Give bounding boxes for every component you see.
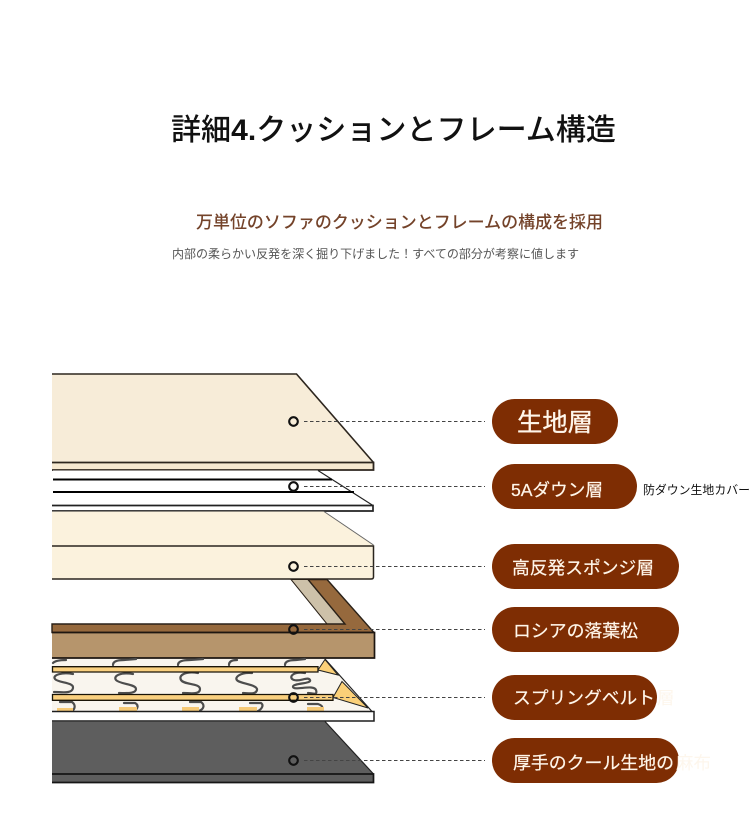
callout: high-resilience sponge layer <box>289 544 679 589</box>
layer: high-resilience sponge <box>52 512 374 579</box>
note: down-proof fabric cover: 防ダウン生地カバー <box>643 482 750 497</box>
layer: spring belts <box>52 659 374 721</box>
callout: spring belt <box>289 675 674 720</box>
callout: 5A down layer <box>289 464 637 509</box>
description text: 内部の柔らかい反発を深く掘り下げました！すべての部分が考察に値します <box>172 246 579 261</box>
title: 詳細4.クッションとフレーム構造 <box>171 114 616 147</box>
subtitle: 万単位のソファのクッションとフレームの構成を採用 <box>196 213 603 232</box>
callout: fabric layer <box>289 399 618 444</box>
callout: spring belt: スプリングベルト <box>513 688 655 708</box>
callout: thick cool fabric <box>289 738 711 783</box>
callout: high-resilience sponge layer: 高反発スポンジ層 <box>512 558 654 578</box>
callout: fabric layer: 生地層 <box>517 409 593 437</box>
callout: Russian larch: ロシアの落葉松 <box>513 621 638 641</box>
callout: thick cool fabric: 厚手のクール生地の <box>513 753 674 773</box>
layer: fabric layer <box>52 374 374 470</box>
callout: thick cool fabric: 麻布 <box>676 753 711 773</box>
callout: spring belt: 層 <box>657 688 674 708</box>
layer: 5A down layer <box>52 470 373 511</box>
callout: 5A down layer: 5Aダウン層 <box>511 480 603 500</box>
layer: thick cool fabric <box>52 722 374 783</box>
callout: Russian larch <box>289 607 679 652</box>
layer: Russian larch frame <box>52 580 374 658</box>
